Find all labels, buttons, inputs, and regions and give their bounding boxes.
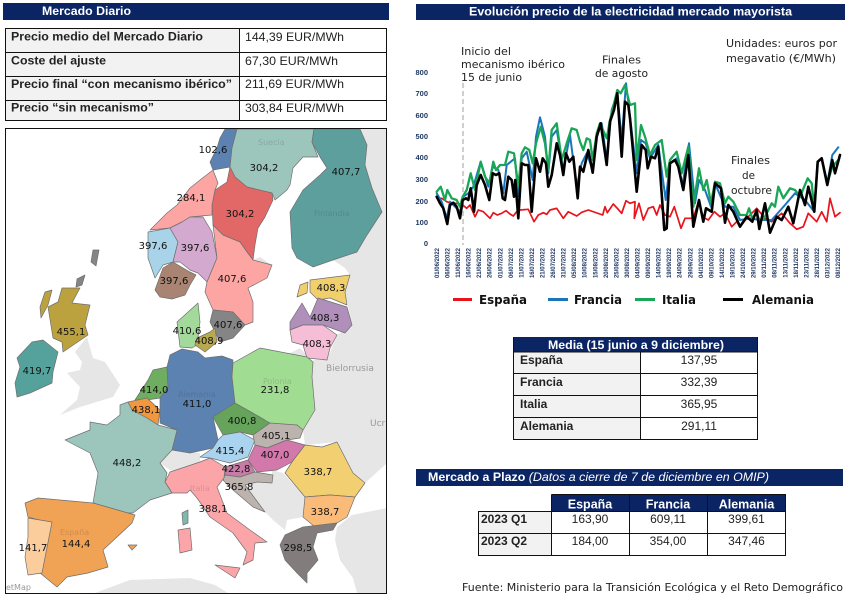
map: precios por zona: 408,3 xyxy=(303,339,331,350)
y axis labels: 800 xyxy=(415,68,428,77)
map: nombres de países en gris: Alemania xyxy=(178,390,216,399)
table: mercado a plazo: 184,00 xyxy=(572,534,609,548)
x axis date labels: 28/11/2022 xyxy=(815,247,821,278)
y axis labels: 200 xyxy=(415,197,428,206)
table: media 15 junio a 9 diciembre: Media (15 junio a 9 diciembre) xyxy=(548,338,724,352)
heading: Mercado a Plazo: Mercado a Plazo (Datos a cierre de 7 de diciembre en OMIP) xyxy=(428,470,769,484)
map: precios por zona: 397,6 xyxy=(139,241,167,252)
x axis date labels: 16/07/2022 xyxy=(530,247,536,278)
map: precios por zona: 144,4 xyxy=(62,539,90,550)
table: mercado a plazo: Alemania xyxy=(719,498,775,512)
map: precios por zona: 407,0 xyxy=(261,450,289,461)
x axis date labels: 29/09/2022 xyxy=(688,247,694,278)
map: precios por zona: 284,1 xyxy=(177,193,205,204)
annotation: inicio del mecanismo xyxy=(461,45,565,84)
x axis date labels: 09/09/2022 xyxy=(646,247,652,278)
table: mercado a plazo: Francia xyxy=(646,498,691,512)
x axis date labels: 21/06/2022 xyxy=(477,247,483,278)
annotation: unidades: Unidades: euros por xyxy=(726,37,837,50)
annotation: finales de octubre: octubre xyxy=(731,184,772,197)
x axis date labels: 14/10/2022 xyxy=(720,247,726,278)
table: precios del Mercado Diario: Precio medio del Mercado Diario xyxy=(11,30,203,44)
y axis labels xyxy=(415,68,428,248)
map: precios por zona xyxy=(19,145,360,554)
map: precios por zona: 438,1 xyxy=(132,405,160,416)
annotation: finales de octubre: de xyxy=(742,169,755,182)
annotation: unidades xyxy=(726,37,837,65)
table: media 15 junio a 9 diciembre: Italia xyxy=(520,397,548,411)
table: mercado a plazo: 347,46 xyxy=(728,534,765,548)
x axis date labels: 10/08/2022 xyxy=(583,247,589,278)
map: precios por zona: 408,3 xyxy=(317,283,345,294)
series: España xyxy=(437,198,840,229)
series: Italia xyxy=(437,85,838,222)
table: mercado a plazo: España xyxy=(568,498,613,512)
table: media 15 junio a 9 diciembre: España xyxy=(520,353,563,367)
map: precios por zona: 338,7 xyxy=(311,507,339,518)
map: precios por zona: 455,1 xyxy=(57,327,85,338)
map: precios por zona: 304,2 xyxy=(226,209,254,220)
x axis date labels: 03/11/2022 xyxy=(762,247,768,278)
x axis date labels: 03/12/2022 xyxy=(826,247,832,278)
map: países coloreados xyxy=(15,129,382,587)
x axis date labels: 01/07/2022 xyxy=(498,247,504,278)
x axis date labels: 25/08/2022 xyxy=(614,247,620,278)
x axis date labels: 20/08/2022 xyxy=(604,247,610,278)
map: precios por zona: 397,6 xyxy=(181,243,209,254)
map: precios por zona: 405,1 xyxy=(262,431,290,442)
annotation: inicio del mecanismo: 15 de junio xyxy=(461,71,522,84)
table: mercado a plazo: 2023 Q2 xyxy=(481,534,527,548)
x axis date labels: 30/08/2022 xyxy=(625,247,631,278)
panel: mapa de precios en Europa xyxy=(6,128,387,594)
map: precios por zona: 408,3 xyxy=(311,313,339,324)
y axis labels: 400 xyxy=(415,153,428,162)
series: Francia xyxy=(437,83,838,220)
x axis date labels: 29/10/2022 xyxy=(752,247,758,278)
legend: España xyxy=(479,292,527,307)
y axis labels: 600 xyxy=(415,111,428,120)
x axis date labels: 14/09/2022 xyxy=(657,247,663,278)
table: precios del Mercado Diario xyxy=(6,28,386,120)
x axis date labels: 06/07/2022 xyxy=(509,247,515,278)
map: precios por zona: 141,7 xyxy=(19,543,47,554)
x axis date labels: 11/06/2022 xyxy=(456,247,462,278)
y axis labels: 700 xyxy=(415,89,428,98)
map: precios por zona: 231,8 xyxy=(261,385,289,396)
x axis date labels: 13/11/2022 xyxy=(783,247,789,278)
x axis date labels: 21/07/2022 xyxy=(540,247,546,278)
map: precios por zona: 397,6 xyxy=(160,276,188,287)
y axis labels: 300 xyxy=(415,175,428,184)
map: precios por zona: 411,0 xyxy=(183,399,211,410)
map: precios por zona: 388,1 xyxy=(199,504,227,515)
table: mercado a plazo: 354,00 xyxy=(650,534,687,548)
heading: Mercado Diario xyxy=(3,3,389,20)
table: media 15 junio a 9 diciembre: 365,95 xyxy=(681,397,718,411)
map: nombres de países en gris: Finlandia xyxy=(314,209,350,218)
y axis labels: 0 xyxy=(424,239,428,248)
annotation: inicio del mecanismo: mecanismo ibérico xyxy=(461,58,565,71)
x axis date labels: 01/06/2022 xyxy=(435,247,441,278)
x axis date labels xyxy=(435,247,842,278)
heading: Evolución precio xyxy=(416,4,845,20)
annotation: finales de agosto: Finales xyxy=(602,54,641,66)
dashed marker: 15 de junio xyxy=(462,83,464,245)
table: mercado a plazo: 2023 Q1 xyxy=(481,512,527,526)
y axis labels: 500 xyxy=(415,132,428,141)
x axis date labels: 04/10/2022 xyxy=(699,247,705,278)
map: precios por zona: 304,2 xyxy=(250,163,278,174)
annotation: finales de agosto: de agosto xyxy=(595,67,648,80)
line chart: precio de la electricidad xyxy=(415,68,842,278)
x axis date labels: 15/08/2022 xyxy=(593,247,599,278)
map: nombres de países en gris: Suecia xyxy=(258,138,285,147)
x axis date labels: 05/08/2022 xyxy=(572,247,578,278)
legend: Francia xyxy=(574,292,622,307)
map: nombres de países en gris: Ucr xyxy=(370,419,386,429)
x axis date labels: 04/09/2022 xyxy=(636,247,642,278)
map: precios por zona: 298,5 xyxy=(284,543,312,554)
x axis date labels: 19/10/2022 xyxy=(730,247,736,278)
map: nombres de países en gris: Bielorrusia xyxy=(326,364,374,374)
map: precios por zona: 365,8 xyxy=(225,482,253,493)
map: nombres de países en gris: Polonia xyxy=(263,377,292,386)
map: precios por zona: 410,6 xyxy=(173,326,201,337)
map: precios por zona: 102,6 xyxy=(199,145,227,156)
x axis date labels: 16/06/2022 xyxy=(467,247,473,278)
table: precios del Mercado Diario: Coste del ajuste xyxy=(11,54,106,68)
table: media 15 junio a 9 diciembre: Alemania xyxy=(520,419,574,433)
annotation: inicio del mecanismo: Inicio del xyxy=(461,45,511,58)
x axis date labels: 09/10/2022 xyxy=(709,247,715,278)
annotation: finales de octubre xyxy=(731,154,772,197)
table: precios del Mercado Diario: 144,39 EUR/MWh xyxy=(245,30,344,44)
table: media 15 junio a 9 diciembre: 137,95 xyxy=(681,353,718,367)
x axis date labels: 19/09/2022 xyxy=(667,247,673,278)
map: precios por zona: 414,0 xyxy=(140,385,168,396)
table: media 15 junio a 9 diciembre: Francia xyxy=(520,375,563,389)
map: precios por zona: 407,6 xyxy=(218,274,246,285)
table: media 15 junio a 9 diciembre xyxy=(514,337,758,440)
map: precios por zona: 338,7 xyxy=(304,467,332,478)
x axis date labels: 23/11/2022 xyxy=(804,247,810,278)
heading: Mercado Diario: Mercado Diario xyxy=(42,4,131,18)
legend xyxy=(453,292,814,307)
x axis date labels: 31/07/2022 xyxy=(562,247,568,278)
table: precios del Mercado Diario: Precio “sin mecanismo” xyxy=(11,100,154,114)
map: precios por zona: 407,7 xyxy=(332,167,360,178)
map: nombres de países en gris xyxy=(6,138,386,592)
table: media 15 junio a 9 diciembre: 332,39 xyxy=(681,375,718,389)
map: precios por zona: 419,7 xyxy=(23,366,51,377)
series: Alemania xyxy=(437,93,840,233)
map: precios por zona: 408,9 xyxy=(195,336,223,347)
y axis labels: 100 xyxy=(415,218,428,227)
heading: Evolución precio: Evolución precio de la electricidad mercado mayorista xyxy=(469,4,792,18)
table: precios del Mercado Diario: 211,69 EUR/MWh xyxy=(245,77,344,91)
annotation: finales de agosto xyxy=(595,54,648,80)
map: precios por zona: 448,2 xyxy=(113,458,141,469)
table: precios del Mercado Diario: 67,30 EUR/MWh xyxy=(245,54,338,68)
map: precios por zona: 422,8 xyxy=(222,464,250,475)
map: nombres de países en gris: España xyxy=(60,528,89,537)
x axis date labels: 26/06/2022 xyxy=(488,247,494,278)
x axis date labels: 24/10/2022 xyxy=(741,247,747,278)
source note: Fuente: Ministerio para la Transición Ecológica y el Reto Demográfico xyxy=(462,581,843,594)
x axis date labels: 11/07/2022 xyxy=(519,247,525,278)
legend: Alemania xyxy=(752,292,814,307)
x axis date labels: 06/06/2022 xyxy=(446,247,452,278)
annotation: finales de octubre: Finales xyxy=(731,154,770,167)
table: media 15 junio a 9 diciembre: 291,11 xyxy=(681,419,717,433)
x axis date labels: 24/09/2022 xyxy=(678,247,684,278)
map: precios por zona: 407,6 xyxy=(214,320,242,331)
table: mercado a plazo: 163,90 xyxy=(572,512,609,526)
x axis date labels: 26/07/2022 xyxy=(551,247,557,278)
map: nombres de países en gris: etMap xyxy=(6,583,31,592)
table: mercado a plazo: 399,61 xyxy=(728,512,765,526)
map: nombres de países en gris: Italia xyxy=(190,484,210,493)
table: mercado a plazo: 609,11 xyxy=(650,512,686,526)
annotation: unidades: megavatio (€/MWh) xyxy=(726,52,836,65)
x axis date labels: 08/12/2022 xyxy=(836,247,842,278)
x axis date labels: 08/11/2022 xyxy=(773,247,779,278)
table: mercado a plazo xyxy=(478,494,786,556)
legend: Italia xyxy=(662,292,696,307)
x axis date labels: 18/11/2022 xyxy=(794,247,800,278)
table: precios del Mercado Diario: 303,84 EUR/MWh xyxy=(245,101,344,115)
map: precios por zona: 400,8 xyxy=(228,416,256,427)
map: precios por zona: 415,4 xyxy=(216,446,244,457)
table: precios del Mercado Diario: Precio final “con mecanismo ibérico” xyxy=(11,77,232,91)
heading: Mercado a Plazo xyxy=(416,469,843,486)
